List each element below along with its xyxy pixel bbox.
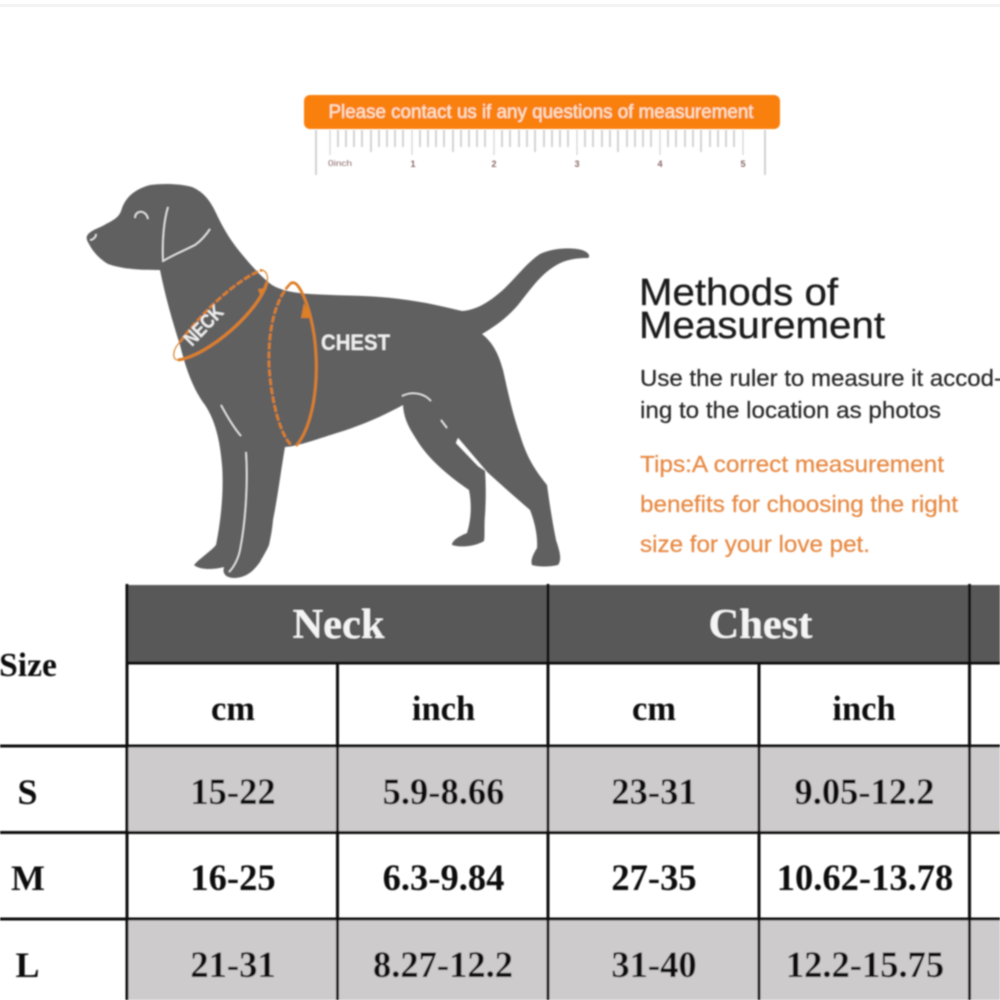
- icon: hind leg gap: [456, 438, 487, 472]
- tips text: size for your love pet.: [640, 531, 870, 557]
- heading: methods of measurement: [639, 272, 885, 347]
- ruler: 2: [491, 159, 497, 169]
- icon: ear and face lines: [163, 207, 210, 261]
- heading: methods of measurement: Measurement: [639, 305, 885, 347]
- neck ring: [174, 270, 267, 360]
- heading: methods of measurement: Methods of: [639, 272, 838, 314]
- row S background: [127, 746, 1000, 832]
- tips text: Tips:A correct measurement: [640, 451, 945, 477]
- size column: L: [15, 945, 40, 985]
- unit headers: inch: [832, 690, 896, 728]
- ruler: 3: [574, 159, 580, 169]
- label: neck: NECK: [180, 301, 229, 350]
- size column: M: [11, 858, 45, 898]
- size column: Size: [0, 647, 57, 684]
- chest ring: [269, 283, 316, 446]
- tips text: [640, 451, 959, 557]
- dog silhouette with measurement marks: [87, 184, 589, 578]
- icon: dog body: [87, 184, 589, 578]
- heading: neck: Neck: [292, 601, 385, 648]
- ruler: 1: [410, 159, 416, 169]
- row M values: 10.62-13.78: [777, 857, 953, 898]
- unit headers: [211, 690, 896, 728]
- row M values: [190, 857, 953, 898]
- ruler: [316, 130, 765, 175]
- size column: S: [17, 772, 38, 812]
- unit headers: cm: [211, 690, 255, 728]
- instruction text: Use the ruler to measure it accod-: [640, 365, 1000, 391]
- label: chest: CHEST: [321, 330, 391, 355]
- row L values: 12.2-15.75: [786, 944, 944, 985]
- instruction text: ing to the location as photos: [640, 397, 941, 423]
- unit headers: inch: [412, 690, 475, 728]
- banner: contact us: [304, 95, 780, 129]
- row M values: 6.3-9.84: [383, 857, 504, 898]
- row L values: 21-31: [190, 944, 276, 985]
- heading: chest: Chest: [709, 601, 812, 648]
- row L values: 31-40: [611, 944, 697, 985]
- row S values: [190, 771, 934, 812]
- ruler: 4: [657, 159, 663, 169]
- ruler: 0inch: [328, 159, 352, 168]
- tips text: benefits for choosing the right: [640, 491, 959, 517]
- banner: contact us: Please contact us if any questions of measurement: [328, 102, 754, 123]
- row S values: 15-22: [190, 771, 276, 812]
- size table: [0, 584, 1000, 1000]
- row S values: 23-31: [611, 771, 697, 812]
- row L background: [127, 919, 1000, 1000]
- row M values: 16-25: [190, 857, 276, 898]
- size column: [0, 647, 57, 985]
- unit headers: cm: [632, 690, 676, 728]
- row M values: 27-35: [611, 857, 697, 898]
- ruler: 5: [740, 159, 746, 169]
- row S values: 5.9-8.66: [383, 771, 504, 812]
- instruction text: [640, 365, 1000, 423]
- row L values: 8.27-12.2: [373, 944, 513, 985]
- table header band: [127, 585, 1000, 663]
- row S values: 9.05-12.2: [795, 771, 934, 812]
- row L values: [190, 944, 944, 985]
